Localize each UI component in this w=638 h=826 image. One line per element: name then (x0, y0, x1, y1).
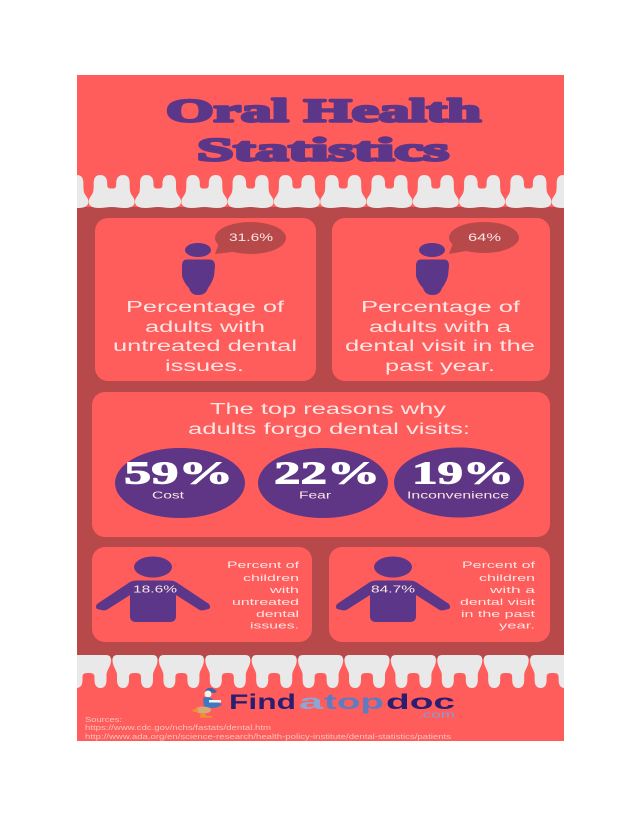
heading: top reasons (188, 401, 470, 438)
stat: 59% cost: Cost (152, 490, 184, 502)
icon: child figure 84.7%: 84.7% (371, 584, 415, 596)
text: adults visit: past year. (385, 358, 495, 375)
text: adults untreated (113, 299, 297, 375)
text: adults visit: dental visit in the (345, 338, 535, 355)
stat: 19% inconvenience (394, 448, 524, 518)
text: children visit: dental visit (460, 597, 536, 608)
text: children visit: Percent of (462, 560, 536, 571)
logo wordmark: top (324, 691, 384, 714)
stat: 59% cost: 59% (124, 454, 233, 490)
stat: 22% fear: 22% (274, 454, 380, 490)
panel: adults with untreated dental issues (95, 218, 316, 381)
icon: speech bubble 64%: 64% (468, 232, 501, 244)
text: children visit: with a (488, 585, 536, 596)
stat: 19% inconvenience: Inconvenience (407, 490, 510, 502)
panel: children dental visit (329, 547, 550, 642)
stat: 19% inconvenience: 19% (412, 454, 514, 490)
text: children visit (460, 560, 536, 632)
logo: Findatopdoc (192, 688, 456, 720)
title: Statistics (197, 132, 449, 168)
heading: top reasons: adults forgo dental visits: (188, 421, 470, 438)
dark mouth band (77, 207, 564, 659)
icon: adult figure (182, 243, 215, 295)
text: children untreated: children (243, 573, 299, 584)
title (166, 94, 481, 168)
icon: adult figure (416, 243, 449, 295)
logo wordmark (229, 691, 456, 720)
stat: 59% cost (115, 448, 245, 518)
text: children untreated: dental (256, 609, 299, 620)
logo wordmark: .com (418, 710, 455, 720)
sources: Sources: (85, 717, 122, 724)
text: children untreated: issues. (250, 620, 299, 632)
text: adults untreated: adults with (145, 319, 265, 336)
stat: 22% fear: Fear (299, 490, 332, 502)
icon: speech bubble 64% (449, 222, 519, 254)
title: Oral Health (166, 94, 481, 130)
icon: child figure 18.6% (96, 556, 210, 622)
panel: top reasons (92, 392, 550, 537)
text: adults untreated: untreated dental (113, 338, 297, 355)
sources (85, 717, 452, 741)
text: children visit: year. (499, 620, 535, 632)
text: adults visit: adults with a (369, 319, 512, 336)
text: children untreated: with (268, 585, 299, 596)
logo wordmark: doc (386, 691, 456, 714)
icon: cartoon duck mascot (192, 688, 222, 718)
poster background (77, 75, 564, 741)
logo wordmark: a (299, 691, 324, 714)
panel: children untreated (92, 547, 312, 642)
text: adults visit (345, 299, 535, 375)
panel: adults with a dental visit (332, 218, 550, 381)
upper teeth row (77, 175, 564, 208)
icon: speech bubble 31.6% (215, 222, 286, 254)
icon: speech bubble 31.6%: 31.6% (229, 232, 273, 244)
logo wordmark: Find (229, 691, 296, 714)
text: adults untreated: Percentage of (126, 299, 285, 316)
sources: http://www.ada.org/en/science-research/health-policy-institute/dental-statistics/patients (85, 734, 452, 741)
text: children untreated: untreated (232, 597, 299, 608)
heading: top reasons: The top reasons why (210, 401, 446, 418)
coral gum behind lower teeth (77, 659, 564, 689)
text: children untreated: Percent of (227, 560, 300, 571)
text: adults untreated: issues. (165, 358, 244, 375)
lower teeth row (66, 655, 575, 688)
sources: https://www.cdc.gov/nchs/fastats/dental.htm (85, 725, 271, 732)
text: children visit: in the past (461, 609, 536, 620)
icon: child figure 18.6%: 18.6% (133, 584, 177, 596)
text: adults visit: Percentage of (361, 299, 521, 316)
stat: 22% fear (258, 448, 388, 518)
text: children untreated (227, 560, 300, 632)
text: children visit: children (479, 573, 535, 584)
icon: child figure 84.7% (336, 556, 450, 622)
